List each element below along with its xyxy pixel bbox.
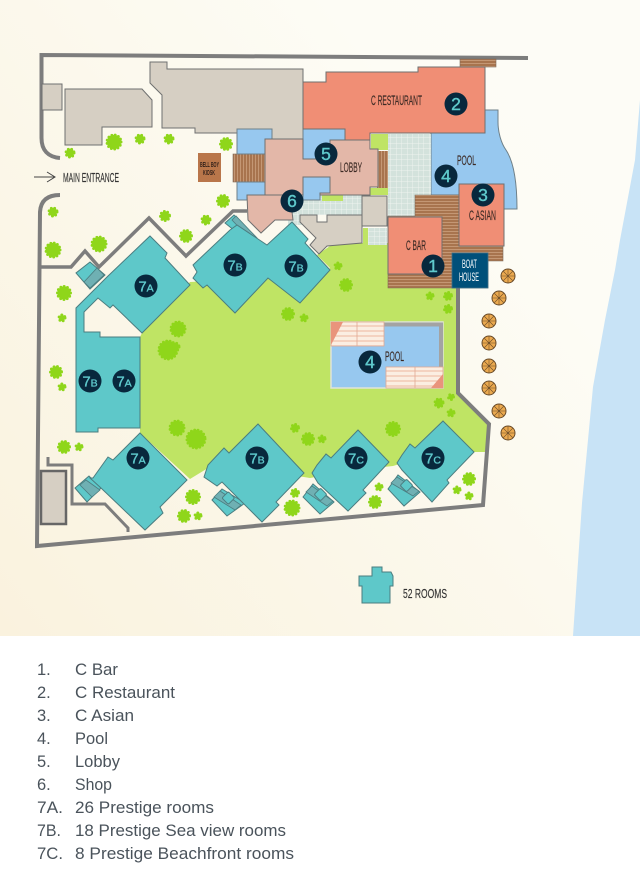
bell boy kiosk: BELL BOY bbox=[200, 160, 219, 169]
marker 7B north left bbox=[224, 254, 246, 276]
legend: C Restaurant bbox=[75, 684, 175, 702]
C Restaurant bbox=[303, 67, 485, 140]
legend: 7C. bbox=[37, 845, 63, 863]
marker 1 bbox=[422, 254, 444, 278]
top deck bbox=[460, 59, 496, 67]
marker 2: 2 bbox=[451, 94, 461, 114]
marker 7B west: 7B bbox=[82, 374, 98, 390]
timber decks bbox=[233, 151, 503, 288]
rooms 7A and 7B west wing bbox=[76, 236, 190, 432]
grey building near shop bbox=[300, 196, 387, 254]
legend: 4. bbox=[37, 730, 51, 748]
lobby building: LOBBY bbox=[340, 160, 362, 175]
marker 7B south bbox=[246, 446, 268, 470]
legend bbox=[37, 661, 294, 863]
legend: 6. bbox=[37, 776, 51, 794]
beach umbrellas bbox=[482, 269, 515, 440]
boat house bbox=[452, 253, 488, 288]
trees bbox=[46, 135, 474, 522]
legend: 18 Prestige Sea view rooms bbox=[75, 822, 286, 840]
location markers bbox=[78, 92, 494, 470]
C Asian bbox=[459, 184, 504, 246]
boat house: HOUSE bbox=[459, 270, 479, 284]
marker 7A south bbox=[126, 446, 150, 470]
bell boy kiosk: KIOSK bbox=[203, 168, 215, 177]
tiled walkways bbox=[288, 134, 431, 245]
marker 4 lower: 4 bbox=[365, 352, 375, 372]
rooms 7A south bbox=[75, 433, 187, 530]
room count key: 52 ROOMS bbox=[403, 586, 447, 601]
marker 5 bbox=[314, 142, 338, 166]
marker 7A west bbox=[112, 370, 136, 392]
grey service buildings bbox=[41, 62, 303, 524]
legend: C Asian bbox=[75, 707, 134, 725]
rooms 7B south bbox=[204, 424, 304, 522]
asian label: C ASIAN bbox=[469, 208, 496, 223]
legend: C Bar bbox=[75, 661, 119, 679]
lobby water features bbox=[237, 129, 345, 200]
marker 7B south: 7B bbox=[249, 450, 265, 468]
marker 4 upper bbox=[434, 164, 458, 188]
legend: 1. bbox=[37, 661, 51, 679]
lawn bbox=[140, 243, 489, 479]
green patches bbox=[322, 134, 388, 245]
marker 7B north right: 7B bbox=[288, 258, 304, 276]
marker 6 bbox=[280, 190, 304, 212]
legend: 7A. bbox=[37, 799, 63, 817]
pool label: POOL bbox=[457, 153, 476, 168]
upper pool bbox=[431, 110, 517, 209]
marker 7B north right bbox=[284, 254, 308, 278]
legend: Shop bbox=[75, 776, 112, 794]
marker 7A north bbox=[134, 274, 158, 298]
main entrance arrow and label bbox=[34, 171, 119, 185]
marker 7C centre bbox=[344, 446, 368, 470]
C Bar bbox=[388, 217, 442, 274]
C Bar: C BAR bbox=[406, 238, 426, 253]
marker 7C east: 7C bbox=[425, 450, 441, 468]
marker 7C centre: 7C bbox=[348, 450, 364, 468]
shop building bbox=[247, 195, 293, 233]
marker 4 lower bbox=[358, 350, 382, 374]
marker 7A south: 7A bbox=[130, 450, 146, 468]
marker 7C east bbox=[422, 446, 444, 470]
marker 7B north left: 7B bbox=[227, 258, 243, 274]
marker 1: 1 bbox=[428, 256, 438, 276]
marker 7B west bbox=[78, 370, 102, 392]
marker 3 bbox=[472, 184, 494, 206]
C Restaurant: C RESTAURANT bbox=[371, 93, 422, 108]
rooms 7C centre bbox=[303, 430, 389, 514]
marker 7A north: 7A bbox=[138, 278, 154, 296]
lower pool bbox=[331, 322, 443, 388]
rooms 7B north bbox=[193, 215, 330, 313]
marker 6: 6 bbox=[287, 191, 297, 211]
lobby building bbox=[265, 139, 378, 195]
lower pool label: POOL bbox=[385, 349, 404, 364]
legend: 2. bbox=[37, 684, 51, 702]
marker 4 upper: 4 bbox=[441, 166, 451, 186]
legend: Lobby bbox=[75, 753, 121, 771]
map background bbox=[0, 0, 640, 636]
rooms 7C east bbox=[388, 421, 474, 506]
marker 7A west: 7A bbox=[116, 374, 132, 390]
legend: 5. bbox=[37, 753, 51, 771]
legend: 3. bbox=[37, 707, 51, 725]
legend: Pool bbox=[75, 730, 108, 748]
legend: 7B. bbox=[37, 822, 61, 840]
room count key bbox=[359, 567, 447, 603]
legend: 8 Prestige Beachfront rooms bbox=[75, 845, 294, 863]
marker 5: 5 bbox=[321, 144, 331, 164]
legend: 26 Prestige rooms bbox=[75, 799, 214, 817]
boat house: BOAT bbox=[462, 257, 477, 271]
sea bbox=[573, 100, 640, 636]
marker 2 bbox=[444, 92, 468, 116]
main entrance arrow and label: MAIN ENTRANCE bbox=[63, 171, 119, 185]
boundary walls bbox=[37, 55, 528, 546]
bell boy kiosk bbox=[198, 153, 221, 182]
marker 3: 3 bbox=[478, 185, 488, 205]
